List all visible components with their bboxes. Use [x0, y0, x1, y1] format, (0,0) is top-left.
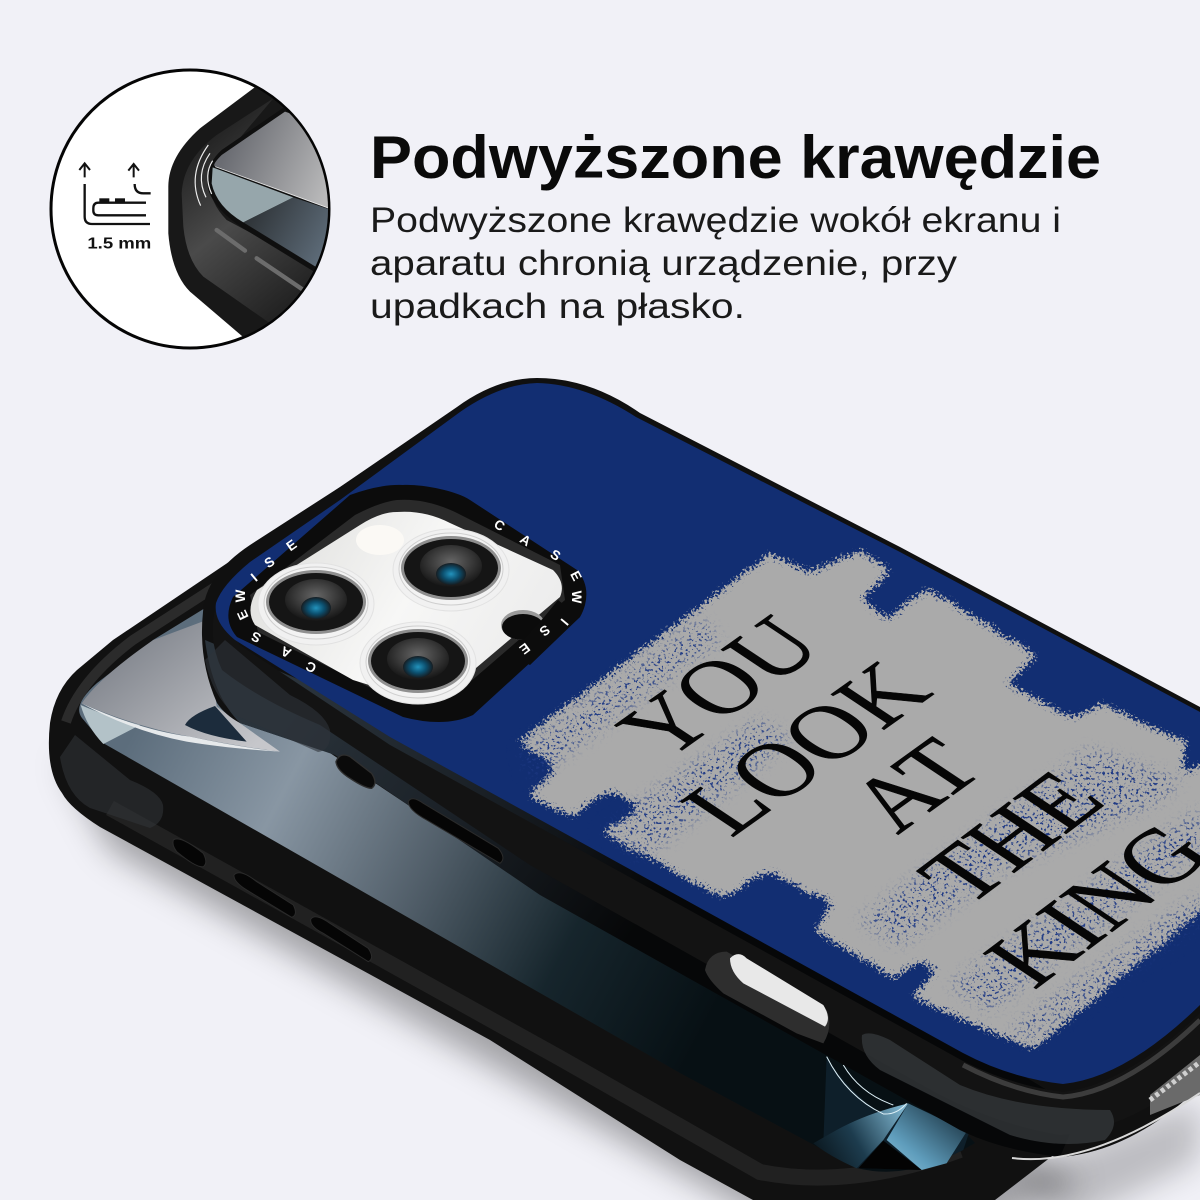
- inset: phone corner close-up: [168, 88, 328, 336]
- brand text ring: W: [233, 589, 248, 602]
- bottom phone: side buttons: [173, 839, 372, 962]
- brand text ring: A: [517, 531, 534, 549]
- icon: 1.5 mm raised lip diagram: [79, 163, 151, 252]
- ring overlay near sensor: [510, 600, 580, 665]
- brand text ring: E: [567, 568, 585, 583]
- brand text ring: A: [278, 643, 294, 661]
- brand text ring: W: [569, 591, 584, 604]
- slogan text on back: LOOK: [659, 646, 953, 850]
- sensor: [501, 610, 545, 640]
- top phone: lower carbon patch: [862, 1033, 1114, 1144]
- bottom phone: screen: [79, 605, 975, 1172]
- flash: [356, 525, 404, 555]
- bottom phone: case: [49, 471, 1060, 1200]
- paint brush strokes: [517, 550, 1200, 1050]
- body text: [370, 201, 1061, 326]
- icon: 1.5 mm raised lip diagram: 1.5 mm: [87, 235, 151, 252]
- bottom phone: wallpaper: [81, 620, 280, 752]
- title: Podwyższone krawędzie: [370, 124, 1101, 191]
- paint speckle streaks: [520, 620, 1200, 1040]
- lens: left: [258, 563, 374, 645]
- inset circle: raised edge detail: [51, 70, 340, 360]
- lens: top right: [393, 529, 509, 611]
- lens: bottom: [360, 622, 476, 704]
- brand text ring: [233, 516, 585, 676]
- brand text ring: C: [491, 516, 508, 534]
- camera island: [228, 485, 586, 722]
- brand text ring: E: [234, 608, 252, 622]
- top phone: translucent corner right: [1150, 1055, 1200, 1115]
- body text: upadkach na płasko.: [370, 287, 745, 326]
- brand text ring: E: [283, 537, 299, 554]
- top phone: carbon grip patch: [205, 640, 330, 752]
- brand text ring: E: [517, 640, 533, 657]
- slogan text on back: [595, 601, 1200, 1003]
- slogan text on back: THE: [896, 755, 1126, 920]
- body text: Podwyższone krawędzie wokół ekranu i: [370, 201, 1061, 240]
- top phone: charging port: [705, 952, 829, 1043]
- brand text ring: S: [261, 554, 277, 571]
- camera plate: [250, 512, 562, 696]
- top phone: navy back: [216, 383, 1200, 1084]
- top phone: black rim: [213, 610, 1200, 1135]
- shadow under phones: [62, 760, 1080, 1200]
- brand text ring: C: [303, 658, 319, 676]
- brand text ring: S: [537, 622, 553, 639]
- bottom phone: wallpaper rays: [813, 1057, 970, 1170]
- top phone: translucent side wall: [205, 640, 1080, 1157]
- body text: aparatu chronią urządzenie, przy: [370, 244, 958, 283]
- brand text ring: I: [557, 616, 571, 628]
- slogan text on back: YOU: [595, 601, 844, 774]
- camera ring: [228, 485, 586, 722]
- brand text ring: S: [249, 628, 263, 646]
- slogan text on back: AT: [826, 723, 1005, 847]
- top phone: case: [202, 378, 1200, 1159]
- top phone: side buttons: [336, 755, 503, 863]
- shadow: top phone corner: [1020, 1100, 1200, 1200]
- bottom phone: carbon grip patch: [60, 735, 163, 828]
- brand text ring: I: [248, 571, 260, 585]
- brand text ring: S: [548, 546, 563, 564]
